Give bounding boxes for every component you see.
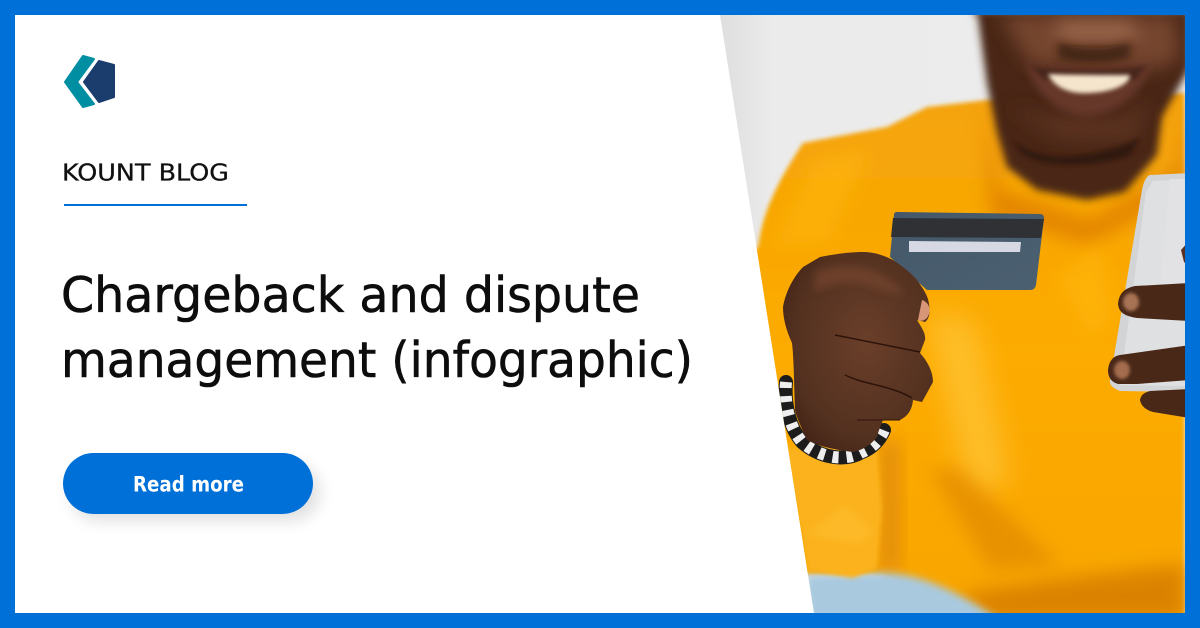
sleeve cuff — [785, 445, 882, 578]
jeans — [805, 573, 1000, 620]
button shadow — [70, 463, 320, 521]
logo — [65, 56, 114, 107]
logo: teal chevron — [65, 56, 94, 107]
hand holding card — [783, 252, 933, 452]
magnetic stripe — [891, 218, 1044, 238]
face and neck — [972, 10, 1190, 200]
signature strip — [909, 241, 1021, 252]
mouth — [1026, 62, 1150, 116]
sweater — [740, 93, 1185, 620]
heading: Chargeback and dispute — [61, 267, 640, 324]
eyebrow rule — [64, 204, 247, 206]
logo: navy pentagon — [84, 61, 114, 102]
heading: management (infographic) — [61, 332, 693, 389]
button: Read more: Read more — [133, 472, 244, 496]
phone hand fingers — [1108, 240, 1190, 418]
photo: man holding credit card and phone — [715, 10, 1190, 620]
phone — [1110, 173, 1190, 392]
wall backdrop — [720, 15, 1185, 560]
heading — [61, 267, 693, 389]
eyebrow: KOUNT BLOG: KOUNT BLOG — [62, 158, 229, 186]
bracelet — [786, 382, 884, 457]
beard — [1012, 138, 1140, 165]
teeth — [1048, 74, 1130, 93]
credit card — [890, 212, 1044, 290]
cheeks and nose — [1000, 15, 1180, 70]
button: Read more — [63, 453, 313, 514]
